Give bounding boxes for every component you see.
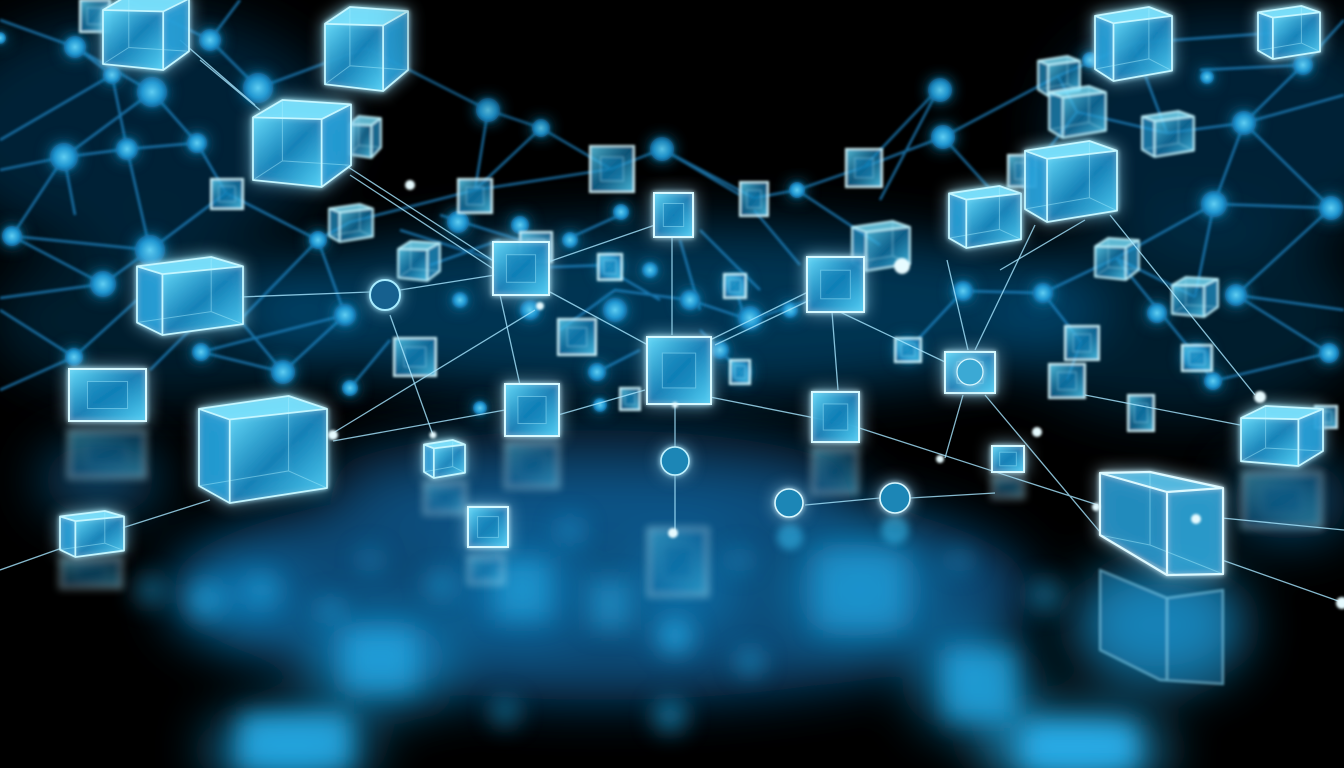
dark vignette at top centre — [420, 0, 940, 120]
glass cube: far lower left — [60, 511, 124, 557]
glass cube: top centre left — [325, 7, 408, 91]
glass cube: centre top — [654, 193, 693, 237]
cube reflections on floor — [60, 430, 1322, 596]
glass cube: bright upper left — [253, 100, 351, 187]
background glow haze — [0, 10, 1344, 420]
glass cube: top right — [1095, 7, 1172, 81]
glass cube: small floor left — [424, 440, 465, 478]
floor reflection blobs — [135, 516, 1135, 768]
glass cube: lower centre — [505, 384, 559, 436]
glass cube: top right corner — [1258, 6, 1320, 59]
glass cube: centre bright — [647, 337, 711, 404]
glass cube: centre left bright — [493, 242, 549, 295]
floor reflections glow — [40, 430, 1344, 768]
glass cube: lower left small — [69, 369, 146, 421]
glass spheres — [370, 280, 983, 517]
glass cube: small with sphere — [945, 352, 995, 393]
glass cube: mid left — [137, 257, 243, 335]
back network nodes — [0, 29, 1343, 415]
glass cube: small floor right — [992, 446, 1024, 472]
glass cube: right of centre — [949, 186, 1021, 248]
glass cube: large lower left — [199, 396, 327, 503]
glass cube: centre right bright — [807, 257, 864, 312]
glass cube: lower centre right — [812, 392, 859, 442]
back network links — [0, 0, 1344, 390]
glass cube: bright upper right — [1025, 141, 1117, 222]
glass cube: small floor — [468, 507, 508, 547]
foreground thin links — [0, 40, 1344, 603]
glass cube: top left — [103, 0, 189, 70]
bright joint dots — [328, 180, 1344, 609]
reflected large cube on floor — [1100, 570, 1223, 684]
glass cube: large lower right — [1100, 472, 1223, 575]
small distant cubes — [80, 0, 1337, 431]
glass cube: right edge — [1241, 406, 1323, 466]
